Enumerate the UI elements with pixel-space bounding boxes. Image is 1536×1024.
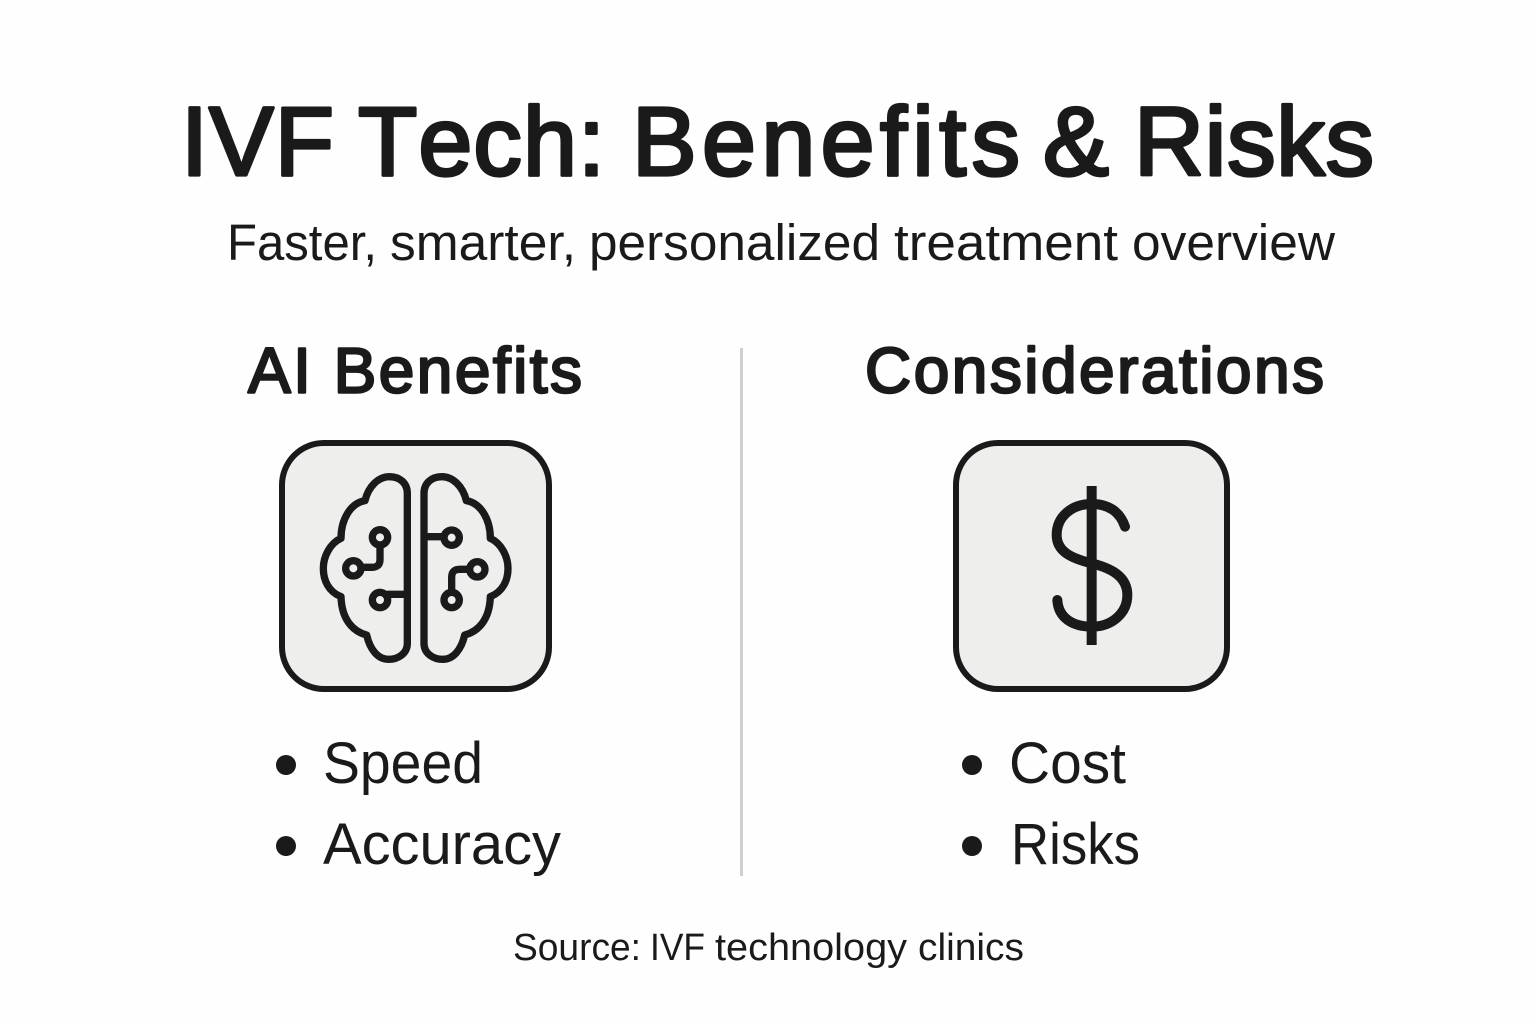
heading: Considerations: Considerations [865, 334, 1324, 406]
bullet list: benefits [276, 731, 561, 877]
source note: technology [715, 927, 907, 969]
bullet list: benefits: Accuracy [323, 812, 561, 877]
source note: Source: [513, 927, 641, 969]
subtitle: smarter, [390, 214, 576, 271]
icon: brain with circuits [282, 443, 549, 689]
panel: considerations [865, 334, 1324, 877]
bullet list: considerations: Cost [1009, 731, 1126, 796]
subtitle: overview [1132, 214, 1335, 271]
title: & [1043, 87, 1109, 196]
source note: IVF [650, 927, 705, 969]
bullet list: considerations: Risks [1011, 812, 1140, 877]
subtitle: Faster, [227, 214, 377, 271]
subtitle: personalized [589, 214, 880, 271]
bullet list: considerations [962, 731, 1140, 877]
source note: clinics [918, 927, 1024, 969]
icon: dollar sign [956, 443, 1227, 689]
title: Benefits [632, 87, 1020, 196]
title: Tech: [358, 87, 605, 196]
panel: AI benefits [248, 334, 582, 877]
title: Risks [1134, 87, 1374, 196]
heading: AI Benefits: AI Benefits [248, 334, 582, 406]
bullet list: benefits: Speed [323, 731, 483, 796]
title: IVF [181, 87, 334, 196]
subtitle: treatment [894, 214, 1118, 271]
